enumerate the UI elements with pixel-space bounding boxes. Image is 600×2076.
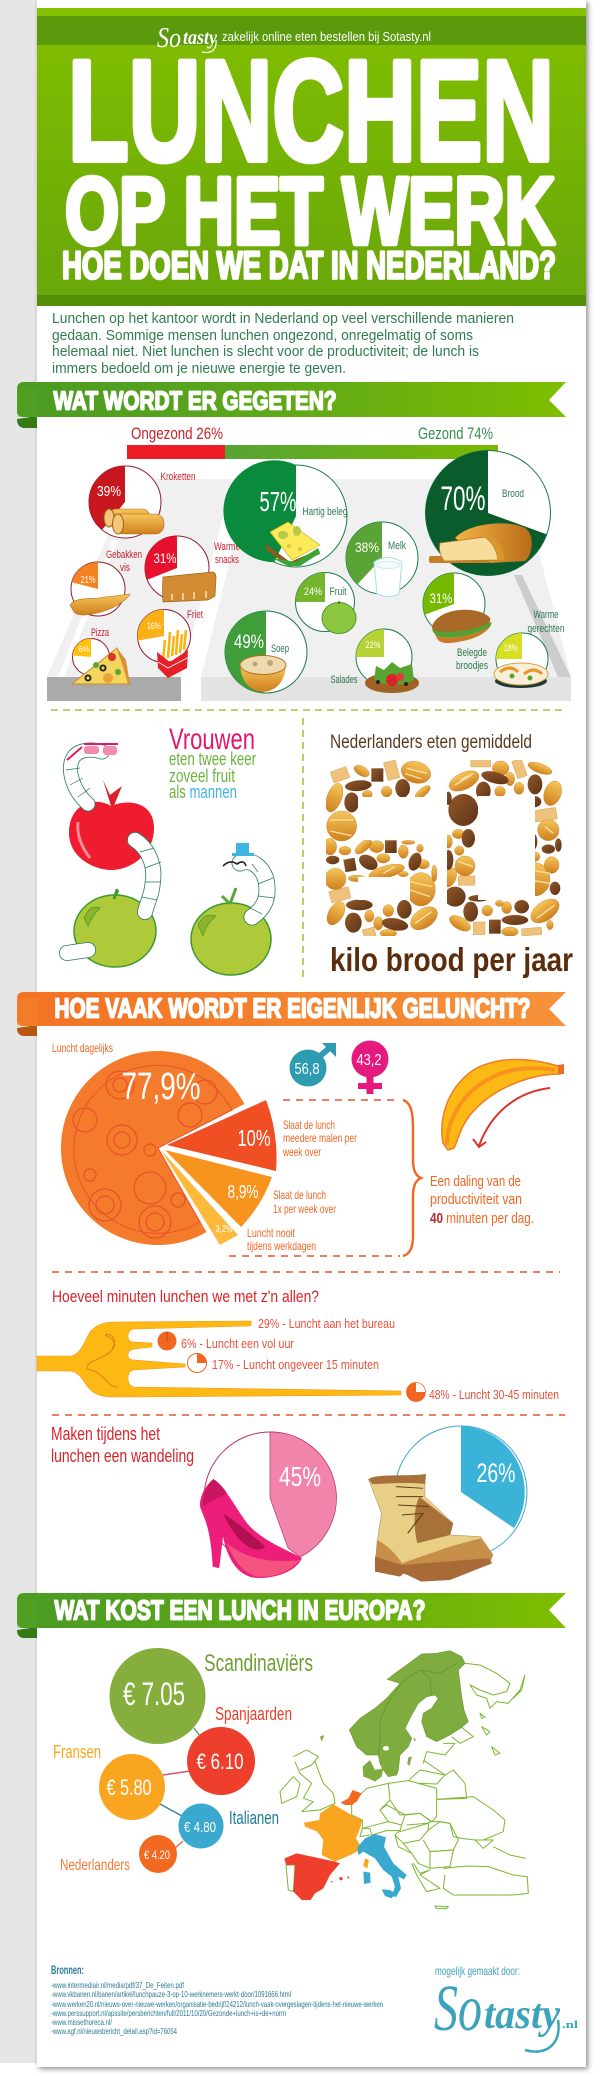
pie: hartig beleg: 57% <box>260 486 296 517</box>
icon: red apple <box>69 780 154 870</box>
header logo: So <box>157 22 181 54</box>
pie: salades <box>330 629 419 693</box>
intro paragraph: helemaal niet. Niet lunchen is slecht voor de productiviteit; de lunch is <box>52 343 479 360</box>
pie: gebakken vis: 21% <box>80 575 96 586</box>
pie: soep <box>225 611 307 693</box>
slice: luncht dagelijks <box>61 1051 244 1245</box>
bubble: nederlanders: € 4.20 <box>144 1848 170 1862</box>
pie: 26% boot: 26% <box>476 1458 516 1488</box>
pie: pizza: Pizza <box>91 627 110 639</box>
credit and logo <box>434 1964 578 2052</box>
header logo <box>157 22 217 54</box>
heading: wandeling <box>51 1424 194 1466</box>
icon: female symbol <box>352 1040 388 1094</box>
icon: green apple left <box>74 889 156 967</box>
pie: brood <box>425 450 550 576</box>
healthy vs unhealthy bar: Gezond 74% <box>418 424 493 443</box>
mini pie: 17% <box>188 1354 379 1372</box>
credit and logo: tasty <box>484 1992 560 2038</box>
pie: warme snacks: 31% <box>154 550 176 566</box>
section banner: wat wordt er gegeten: WAT WORDT ER GEGETEN? <box>54 386 336 416</box>
bubble: nederlanders: Nederlanders <box>60 1857 130 1874</box>
pie: hartig beleg: Hartig beleg <box>302 506 348 518</box>
section banner: wat kost een lunch: WAT KOST EEN LUNCH IN EUROPA? <box>54 1594 426 1626</box>
bubble: spanjaarden: Spanjaarden <box>215 1704 292 1724</box>
text: vrouwen fruit: zoveel fruit <box>169 766 235 786</box>
map south: mainland europe <box>280 1760 528 1909</box>
pie: warme gerechten <box>494 609 564 688</box>
bubble: fransen <box>53 1742 165 1820</box>
chart: fork <box>37 1321 401 1397</box>
healthy vs unhealthy bar <box>127 424 498 459</box>
sources: -www.intermediair.nl/media/pdf/37_De_Feiten.pdf <box>51 1980 184 1990</box>
pie: warme gerechten: Warme <box>534 609 558 621</box>
intro paragraph <box>52 310 514 377</box>
slice descriptions <box>247 1118 357 1253</box>
icon: worm with sunglasses <box>66 744 118 804</box>
text: vrouwen fruit: Vrouwen <box>169 723 255 756</box>
map north: scandinavia and russia coast <box>293 1651 525 1777</box>
slice descriptions: 1x per week over <box>273 1202 336 1216</box>
bubble: fransen: € 5.80 <box>106 1775 152 1800</box>
slice: 3,2% <box>161 1150 238 1245</box>
pie: gebakken vis <box>70 549 142 616</box>
text: productivity decline <box>430 1173 534 1227</box>
sources: -www.werken20.nl/nieuws-over-nieuwe-werken/organisatie-bedrijf/24212/lunch-vaak-overgeslagen-tijdens-het-nieuwe-werken <box>51 1999 383 2009</box>
label: 29%: 29% - Luncht aan het bureau <box>258 1316 395 1331</box>
pie: belegde broodjes: 31% <box>430 590 452 606</box>
pie: kroketten: Kroketten <box>160 471 196 483</box>
bubble: spanjaarden: € 6.10 <box>196 1749 244 1774</box>
sources: -www.agf.nl/nieuwsbericht_detail.asp?id=76054 <box>51 2026 177 2036</box>
pie: fruit: Fruit <box>330 586 346 598</box>
norway sweden finland <box>320 1651 468 1777</box>
pie: 45% heel <box>200 1432 336 1578</box>
healthy vs unhealthy bar: Ongezond 26% <box>131 424 223 443</box>
value labels <box>122 1066 270 1235</box>
pie: warme gerechten: gerechten <box>528 623 564 635</box>
digit 0 <box>441 758 565 936</box>
slice descriptions: week over <box>282 1145 321 1159</box>
bubble: spanjaarden <box>187 1704 292 1795</box>
slice: 8,9% <box>165 1150 272 1227</box>
bubble: fransen: Fransen <box>53 1742 101 1762</box>
slice descriptions: Slaat de lunch <box>283 1118 335 1132</box>
pie: warme snacks <box>145 536 240 602</box>
heading: wandeling: lunchen een wandeling <box>51 1446 194 1466</box>
icon: worm with hat <box>223 843 274 917</box>
pie: pizza <box>72 627 130 684</box>
bubble: scandinaviers: € 7.05 <box>123 1676 185 1712</box>
mini pie: 6% <box>158 1332 295 1351</box>
mini pie: 48% <box>406 1382 559 1402</box>
sources: Bronnen: <box>51 1965 84 1977</box>
arrow: productivity decline <box>473 1088 550 1147</box>
icon: worm through apples <box>67 840 161 953</box>
value labels: 77,9% <box>122 1066 200 1108</box>
pie: hartig beleg <box>223 460 348 567</box>
pie: melk <box>346 522 418 596</box>
mini pie: 48%: 48% - Luncht 30-45 minuten <box>429 1387 559 1402</box>
header logo: tasty <box>183 27 217 49</box>
divider green <box>51 709 565 711</box>
mini pie: 17%: 17% - Luncht ongeveer 15 minuten <box>212 1357 379 1372</box>
pie: pizza: 6% <box>78 645 90 654</box>
slice descriptions: Slaat de lunch <box>273 1188 326 1202</box>
pie: belegde broodjes: broodjes <box>456 660 488 672</box>
icon: high heel <box>200 1479 302 1578</box>
value labels: 8,9% <box>228 1182 258 1202</box>
background strip <box>0 0 37 2063</box>
icon: drooping banana <box>442 1060 564 1150</box>
pie chart: pizza lunch frequency <box>61 1051 277 1245</box>
pie: fruit: 24% <box>304 586 322 598</box>
pie: brood: 70% <box>440 480 486 518</box>
pie: friet <box>137 609 203 678</box>
pie: salades: Salades <box>330 674 358 686</box>
header banner <box>37 8 586 306</box>
pie: gebakken vis: vis <box>120 562 130 574</box>
bubble: nederlanders <box>60 1835 177 1874</box>
value labels: 10% <box>238 1125 270 1151</box>
bubble chart: lunch cost per country <box>53 1648 313 1874</box>
pie: soep: 49% <box>234 632 264 653</box>
pie: warme snacks: snacks <box>215 554 239 566</box>
text: productivity decline: 40 minuten per dag. <box>430 1210 534 1227</box>
sources <box>51 1965 383 2036</box>
pie: salades: 22% <box>366 640 381 651</box>
pie: friet: Friet <box>187 609 203 621</box>
pie: belegde broodjes: Belegde <box>457 647 487 659</box>
big number 60 made of bread <box>322 758 565 940</box>
slice: 10% <box>167 1100 277 1171</box>
bubble: scandinaviers: Scandinaviërs <box>204 1650 313 1677</box>
netherlands <box>341 1790 362 1805</box>
sources: -www.perssupport.nl/apssite/persberichten/full/2011/10/20/Gezonde+lunch+is+de+norm <box>51 2008 286 2018</box>
italy <box>357 1834 407 1897</box>
credit and logo: .nl <box>562 2019 578 2031</box>
intro paragraph: immers bedoeld om je nieuwe energie te geven. <box>52 360 346 377</box>
value labels: 3,2% <box>216 1224 233 1235</box>
icon: green apple right <box>191 888 271 975</box>
denmark <box>363 1760 383 1782</box>
text: vrouwen fruit <box>169 723 256 802</box>
section banner: hoe vaak <box>17 992 566 1036</box>
pie: soep: Soep <box>271 643 289 655</box>
france <box>304 1804 362 1862</box>
credit and logo: So <box>434 1972 482 2045</box>
divider orange 1 <box>52 1271 560 1273</box>
slice descriptions: Luncht nooit <box>247 1226 295 1240</box>
pie: gebakken vis: Gebakken <box>106 549 142 561</box>
pie: melk: Melk <box>388 540 406 552</box>
header tagline: zakelijk online eten bestellen bij Sotasty.nl <box>222 29 431 44</box>
text: nederlanders eten gemiddeld: Nederlanders eten gemiddeld <box>330 732 532 753</box>
bubble: italianen <box>178 1804 279 1848</box>
bubble: italianen: € 4.80 <box>184 1819 216 1836</box>
pie: belegde broodjes <box>423 573 492 672</box>
slice descriptions: meedere malen per <box>283 1131 357 1145</box>
pie: warme snacks: Warme <box>214 541 240 553</box>
label: luncht dagelijks: Luncht dagelijks <box>52 1041 113 1055</box>
pie: brood: Brood <box>502 488 524 500</box>
text: vrouwen fruit: als mannen <box>169 782 237 802</box>
pie: kroketten: 39% <box>97 483 121 500</box>
intro paragraph: gedaan. Sommige mensen lunchen ongezond, onregelmatig of soms <box>52 327 473 344</box>
digit 6 <box>322 758 442 940</box>
pie: friet: 16% <box>147 621 161 631</box>
slice descriptions: tijdens werkdagen <box>247 1239 316 1253</box>
pie: fruit <box>296 572 356 634</box>
pie: melk: 38% <box>355 539 379 555</box>
mini pie: 6%: 6% - Luncht een vol uur <box>181 1336 295 1351</box>
illustrated tables <box>47 479 571 701</box>
bubble: scandinaviers <box>110 1648 313 1744</box>
spain <box>284 1853 340 1900</box>
pie: kroketten <box>89 466 196 538</box>
divider orange 2 <box>52 1414 565 1416</box>
section banner: wat wordt er gegeten <box>17 382 566 428</box>
sources: -www.vkbanen.nl/banen/artikel/lunchpauze-3-op-10-werknemers-werkt-door/1091666.html <box>51 1989 291 1999</box>
pie: warme gerechten: 18% <box>504 643 518 654</box>
pie: 45% heel: 45% <box>279 1461 321 1492</box>
text: vrouwen fruit: eten twee keer <box>169 749 256 769</box>
illustration: apples and worms <box>66 744 274 975</box>
text: productivity decline: Een daling van de <box>430 1173 521 1190</box>
outlined countries <box>280 1760 528 1909</box>
icon: male symbol <box>290 1043 336 1086</box>
sources: -www.missethoreca.nl/ <box>51 2017 112 2027</box>
heading: hoeveel minuten: Hoeveel minuten lunchen we met z'n allen? <box>52 1287 319 1306</box>
icon: male symbol: 56,8 <box>294 1061 320 1078</box>
section banner: wat kost een lunch <box>17 1593 566 1638</box>
divider vertical <box>302 718 304 982</box>
icon: boot <box>368 1474 493 1582</box>
text: productivity decline: productiviteit van <box>430 1191 522 1208</box>
russia and baltic outline <box>293 1663 525 1770</box>
map of europe <box>280 1651 528 1909</box>
bubble: italianen: Italianen <box>229 1808 279 1828</box>
icon: female symbol: 43,2 <box>356 1052 382 1069</box>
intro paragraph: Lunchen op het kantoor wordt in Nederland op veel verschillende manieren <box>52 310 514 327</box>
heading: wandeling: Maken tijdens het <box>51 1424 160 1444</box>
bracket with dashes <box>229 1100 421 1256</box>
pie: 26% boot <box>368 1426 527 1582</box>
credit and logo: mogelijk gemaakt door: <box>435 1964 520 1978</box>
